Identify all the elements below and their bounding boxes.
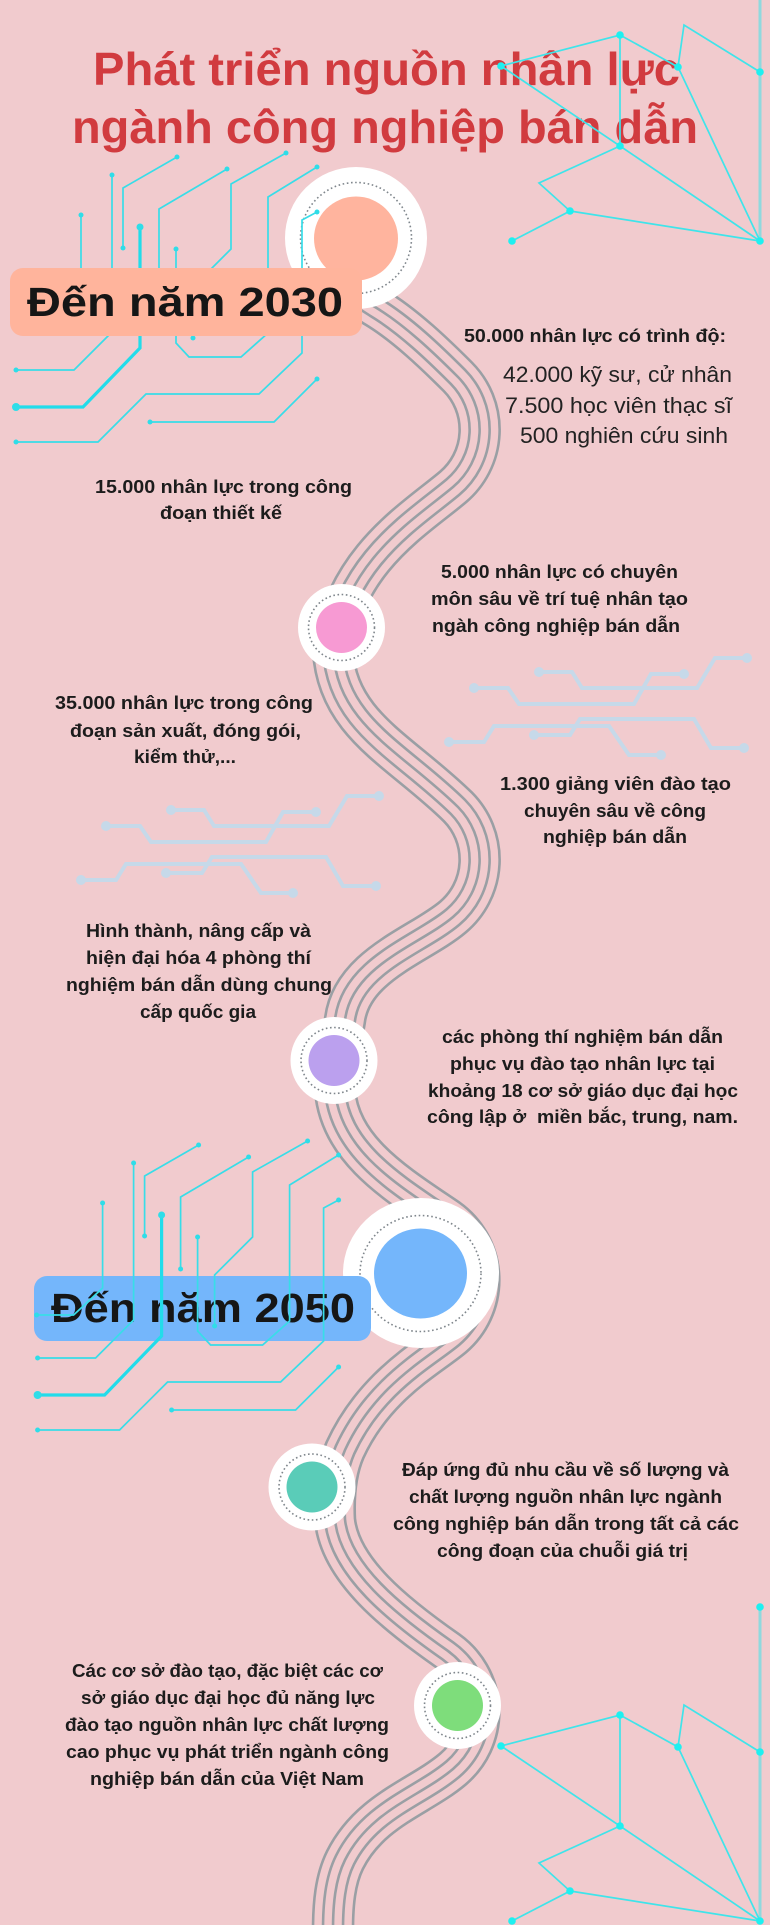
text: các phòng thí nghiệm phục vụ đào tạo: các phòng thí nghiệm bán dẫn (442, 1026, 723, 1047)
milestone circle: teal (268, 1444, 356, 1530)
title: Phát triển nguồn nhân lực (93, 43, 680, 95)
text: 1.300 giảng viên: chuyên sâu về công (524, 800, 706, 821)
heading badge: Đến năm 2030: Đến năm 2030 (27, 279, 343, 325)
text: 5.000 nhân lực trí tuệ nhân tạo: môn sâu về trí tuệ nhân tạo (431, 588, 688, 609)
text: 1.300 giảng viên: 1.300 giảng viên đào tạo (500, 773, 731, 794)
text: Đáp ứng đủ nhu cầu: công nghiệp bán dẫn trong tất cả các (393, 1513, 739, 1534)
milestone circle: 2030 (285, 167, 427, 309)
text: Các cơ sở đào tạo: Các cơ sở đào tạo, đặc biệt các cơ (72, 1660, 384, 1681)
text: các phòng thí nghiệm phục vụ đào tạo: phục vụ đào tạo nhân lực tại (450, 1053, 715, 1074)
heading badge: Đến năm 2050: Đến năm 2050 (51, 1285, 355, 1331)
network decoration: top right (497, 0, 764, 245)
timeline curves (333, 291, 480, 1925)
title (72, 43, 698, 153)
text: 50.000 nhân lực có trình độ (464, 325, 733, 448)
text: Đáp ứng đủ nhu cầu: Đáp ứng đủ nhu cầu về số lượng và (402, 1459, 730, 1480)
circuit decoration: 2050 (34, 1138, 341, 1432)
text: 50.000 nhân lực có trình độ: 42.000 kỹ sư, cử nhân (503, 362, 732, 387)
text: Các cơ sở đào tạo: cao phục vụ phát triển ngành công (66, 1741, 389, 1762)
text: 35.000 nhân lực sản xuất: kiểm thử,... (134, 746, 236, 767)
text: Các cơ sở đào tạo: sở giáo dục đại học đủ năng lực (81, 1687, 375, 1708)
text: phòng thí nghiệm quốc gia: nghiệm bán dẫn dùng chung (66, 974, 332, 995)
text: Các cơ sở đào tạo (65, 1660, 389, 1789)
text: phòng thí nghiệm quốc gia: hiện đại hóa 4 phòng thí (86, 947, 312, 968)
heading badge: Đến năm 2030 (10, 268, 362, 336)
text: 15.000 nhân lực thiết kế: đoạn thiết kế (160, 502, 283, 523)
text: 50.000 nhân lực có trình độ: 50.000 nhân lực có trình độ: (464, 325, 726, 346)
text: 50.000 nhân lực có trình độ: 500 nghiên cứu sinh (520, 423, 728, 448)
text: 5.000 nhân lực trí tuệ nhân tạo: 5.000 nhân lực có chuyên (441, 561, 678, 582)
text: Đáp ứng đủ nhu cầu: công đoạn của chuỗi giá trị (437, 1540, 688, 1561)
text: Đáp ứng đủ nhu cầu (393, 1459, 739, 1561)
text: các phòng thí nghiệm phục vụ đào tạo (427, 1026, 738, 1127)
text: 35.000 nhân lực sản xuất: 35.000 nhân lực trong công (55, 692, 313, 713)
text: 1.300 giảng viên: nghiệp bán dẫn (543, 826, 687, 847)
circuit decoration: 2030 (12, 150, 320, 444)
text: phòng thí nghiệm quốc gia (66, 920, 332, 1022)
circuit decoration: blue right (444, 653, 752, 760)
text: 15.000 nhân lực thiết kế (95, 476, 352, 523)
text: các phòng thí nghiệm phục vụ đào tạo: công lập ở miền bắc, trung, nam. (427, 1106, 738, 1127)
text: 50.000 nhân lực có trình độ: 7.500 học viên thạc sĩ (505, 393, 733, 418)
text: 15.000 nhân lực thiết kế: 15.000 nhân lực trong công (95, 476, 352, 497)
text: 5.000 nhân lực trí tuệ nhân tạo (431, 561, 688, 636)
circuit decoration: blue left (76, 791, 384, 898)
text: Đáp ứng đủ nhu cầu: chất lượng nguồn nhân lực ngành (409, 1486, 722, 1507)
text: phòng thí nghiệm quốc gia: Hình thành, nâng cấp và (86, 920, 312, 941)
milestone circle: 2050 (343, 1198, 499, 1348)
text: 35.000 nhân lực sản xuất (55, 692, 313, 767)
text: 5.000 nhân lực trí tuệ nhân tạo: ngàh công nghiệp bán dẫn (432, 615, 680, 636)
text: 1.300 giảng viên (500, 773, 731, 847)
text: Các cơ sở đào tạo: nghiệp bán dẫn của Việt Nam (90, 1768, 364, 1789)
text: các phòng thí nghiệm phục vụ đào tạo: khoảng 18 cơ sở giáo dục đại học (428, 1080, 738, 1101)
title: ngành công nghiệp bán dẫn (72, 101, 698, 153)
milestone circle: green (414, 1662, 501, 1749)
network decoration: bottom right (497, 1603, 764, 1925)
milestone circle: purple (290, 1017, 378, 1104)
milestone circle: pink (298, 584, 385, 671)
text: phòng thí nghiệm quốc gia: cấp quốc gia (140, 1001, 257, 1022)
text: 35.000 nhân lực sản xuất: đoạn sản xuất, đóng gói, (70, 720, 301, 741)
heading badge: Đến năm 2050 (34, 1276, 371, 1341)
text: Các cơ sở đào tạo: đào tạo nguồn nhân lực chất lượng (65, 1714, 389, 1735)
